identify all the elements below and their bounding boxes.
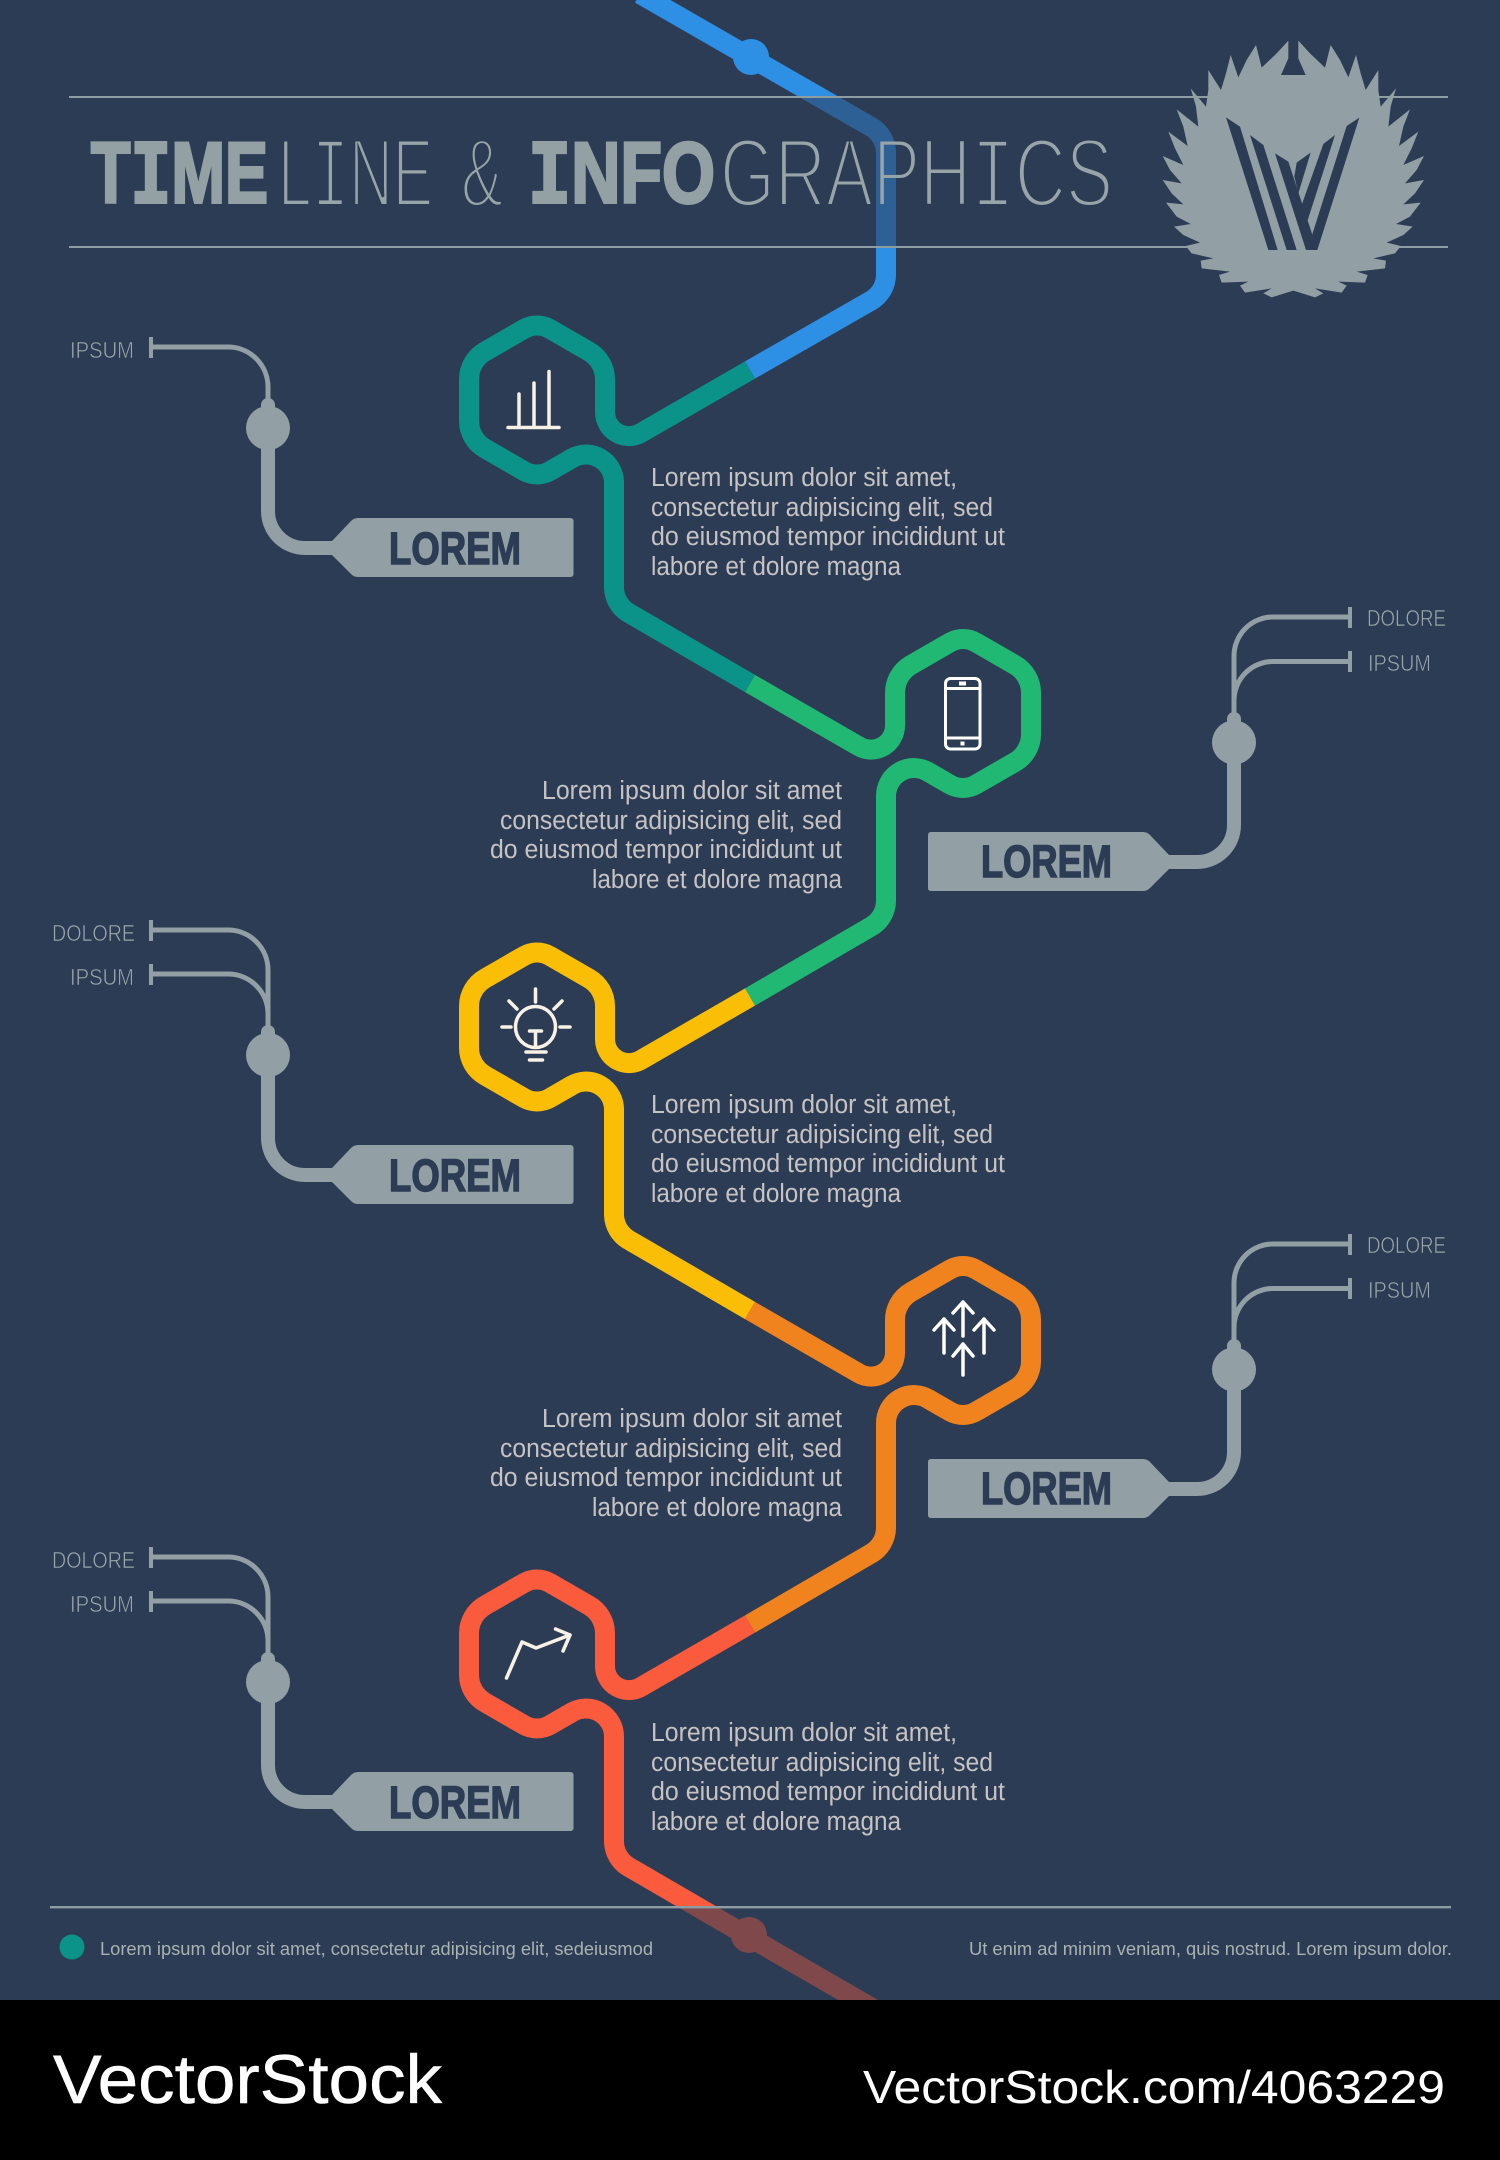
callout tag 5 left [52, 1547, 574, 1831]
footer note left: Lorem ipsum dolor sit amet, consectetur adipisicing elit, sedeiusmod [100, 1939, 653, 1959]
callout tag 3 left: IPSUM [70, 964, 134, 990]
text block 3: consectetur adipisicing elit, sed [651, 1121, 993, 1149]
callout tag 5 left: LOREM [389, 1777, 521, 1828]
text block 3 [651, 1091, 1005, 1208]
text block 2: consectetur adipisicing elit, sed [500, 807, 842, 835]
top blue line segment with node [640, 0, 886, 370]
text block 4: do eiusmod tempor incididunt ut [490, 1464, 842, 1492]
text block 5 [651, 1719, 1005, 1836]
callout tag 2 right: DOLORE [1367, 605, 1446, 631]
callout tag 5 left: IPSUM [70, 1591, 134, 1617]
text block 3: do eiusmod tempor incididunt ut [651, 1150, 1005, 1178]
timeline segment 1 teal hexagon [469, 326, 750, 684]
text block 1: consectetur adipisicing elit, sed [651, 494, 993, 522]
callout tag 2 right [928, 605, 1446, 891]
watermark bar: VectorStock [53, 2041, 443, 2118]
icon: trend arrow [506, 1629, 570, 1678]
text block 4: labore et dolore magna [592, 1494, 843, 1522]
title: INFO [528, 126, 715, 230]
timeline segment 4 orange hexagon [750, 1266, 1031, 1624]
title: LINE [278, 120, 433, 237]
callout tag 3 left: DOLORE [52, 920, 135, 946]
text block 3: labore et dolore magna [651, 1180, 902, 1208]
timeline segment 2 green hexagon [750, 639, 1031, 997]
text block 1: labore et dolore magna [651, 553, 902, 581]
callout tag 2 right: IPSUM [1368, 650, 1431, 676]
icon: bar chart [508, 372, 559, 428]
callout tag 4 right: DOLORE [1367, 1232, 1446, 1258]
callout tag 3 left [52, 920, 574, 1204]
text block 4: Lorem ipsum dolor sit amet [542, 1405, 842, 1433]
timeline segment 3 yellow hexagon [469, 953, 750, 1310]
text block 2: Lorem ipsum dolor sit amet [542, 777, 842, 805]
watermark bar: VectorStock.com/4063229 [863, 2061, 1445, 2113]
callout tag 1 left: IPSUM [70, 337, 134, 363]
text block 5: do eiusmod tempor incididunt ut [651, 1778, 1005, 1806]
callout tag 3 left: LOREM [389, 1150, 521, 1201]
icon: light bulb [502, 989, 570, 1060]
callout tag 1 left [70, 337, 574, 577]
legend dot [60, 1934, 84, 1960]
text block 1 [651, 464, 1005, 581]
text block 4: consectetur adipisicing elit, sed [500, 1435, 842, 1463]
watermark bar [0, 2000, 1500, 2160]
icon: up arrows [934, 1302, 994, 1375]
callout tag 4 right: LOREM [981, 1463, 1112, 1514]
title: & [461, 120, 503, 227]
text block 3: Lorem ipsum dolor sit amet, [651, 1091, 957, 1119]
logo: laurel wreath emblem with V [1163, 41, 1424, 297]
text block 2: do eiusmod tempor incididunt ut [490, 836, 842, 864]
title: TIME [91, 126, 268, 230]
callout tag 4 right [928, 1232, 1446, 1518]
text block 5: Lorem ipsum dolor sit amet, [651, 1719, 957, 1747]
callout tag 4 right: IPSUM [1368, 1277, 1431, 1303]
callout tag 2 right: LOREM [981, 836, 1112, 887]
icon: smartphone [946, 678, 980, 749]
text block 2 [490, 777, 843, 894]
text block 4 [490, 1405, 843, 1522]
text block 1: Lorem ipsum dolor sit amet, [651, 464, 957, 492]
text block 5: labore et dolore magna [651, 1808, 902, 1836]
callout tag 1 left: LOREM [389, 523, 521, 574]
title: GRAPHICS [720, 120, 1113, 237]
dimmed blue line passing behind the title [801, 98, 896, 246]
text block 1: do eiusmod tempor incididunt ut [651, 523, 1005, 551]
title [91, 120, 1113, 237]
text block 5: consectetur adipisicing elit, sed [651, 1749, 993, 1777]
timeline segment 5 red hexagon with tail and node [469, 1580, 885, 2016]
text block 2: labore et dolore magna [592, 866, 843, 894]
footer note right: Ut enim ad minim veniam, quis nostrud. Lorem ipsum dolor. [969, 1939, 1452, 1959]
callout tag 5 left: DOLORE [52, 1547, 135, 1573]
